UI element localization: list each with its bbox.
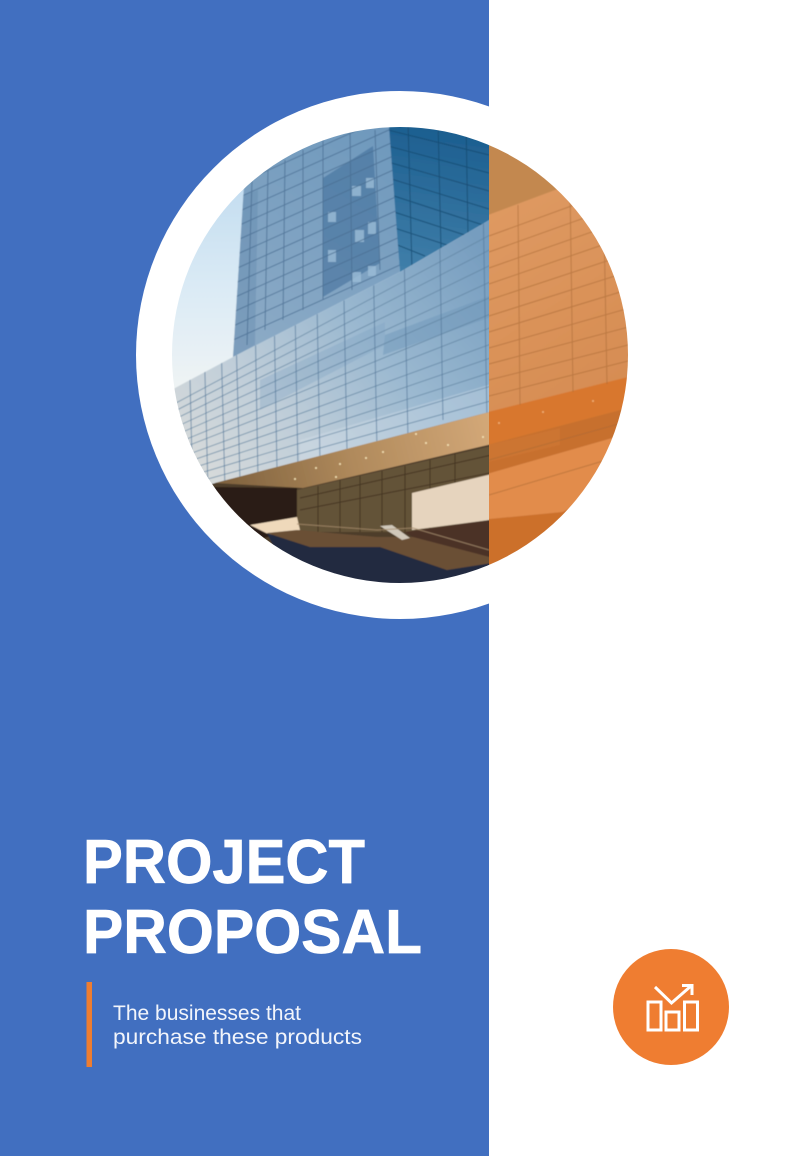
white ring behind photo (136, 91, 664, 619)
left part of photo: natural colours (172, 127, 489, 583)
sky (172, 188, 244, 388)
ground floor dark glass (212, 412, 489, 570)
subtitle: purchase these products (113, 1026, 362, 1049)
orange accent bar (86, 982, 92, 1067)
subtitle: The businesses that (113, 1002, 301, 1025)
orange base (489, 145, 621, 520)
blue side panel (0, 0, 489, 1156)
back wall behind stairs (406, 520, 489, 556)
tower right dark face (388, 127, 489, 272)
stair highlight (380, 525, 410, 540)
main facade wing (174, 220, 489, 484)
icon: growth chart badge (613, 949, 729, 1065)
tower left face (232, 127, 400, 358)
subtitle (113, 1002, 362, 1049)
title: PROJECT (83, 828, 365, 897)
title: PROPOSAL (83, 898, 422, 967)
awning (250, 517, 300, 535)
circular building photo (172, 127, 628, 583)
soffit (215, 408, 505, 488)
title (83, 828, 422, 967)
right part of photo: orange tint (489, 145, 628, 565)
stairs base (266, 532, 489, 583)
reflection patch (411, 474, 489, 531)
stair flight (267, 530, 505, 570)
